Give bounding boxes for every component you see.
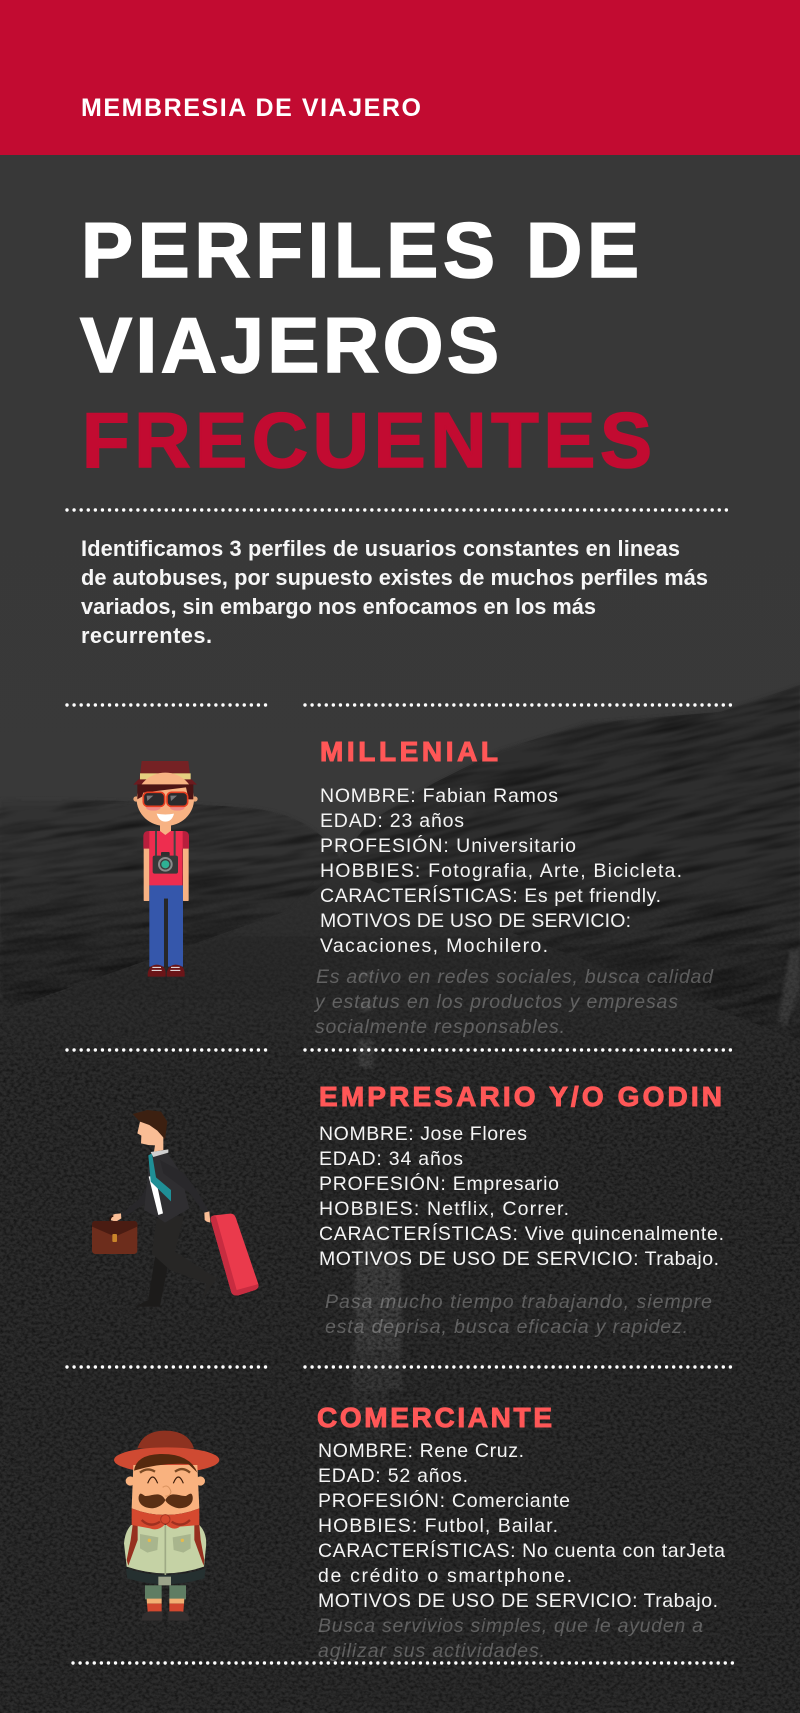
profile details: comerciante	[318, 1440, 725, 1612]
description: comerciante: Busca servivios simples, que le ayuden a	[318, 1615, 703, 1637]
profile details: empresario: PROFESIÓN: Empresario	[319, 1172, 559, 1195]
profile details: millenial: MOTIVOS DE USO DE SERVICIO:	[320, 910, 631, 932]
profile details: comerciante: MOTIVOS DE USO DE SERVICIO: Trabajo.	[318, 1590, 718, 1612]
description: millenial: y estatus en los productos y empresas	[313, 991, 678, 1013]
panel: comerciante	[317, 1402, 725, 1662]
intro paragraph: Identificamos 3 perfiles de usuarios constantes en lineas	[81, 536, 680, 561]
heading: comerciante: COMERCIANTE	[317, 1402, 552, 1433]
icon: businessman with suitcase	[92, 1110, 259, 1307]
panel: millenial	[313, 736, 714, 1038]
description: empresario: esta deprisa, busca eficacia y rapidez.	[325, 1316, 688, 1338]
profile details: comerciante: NOMBRE: Rene Cruz.	[318, 1440, 524, 1462]
description: millenial	[313, 966, 714, 1038]
title: FRECUENTES	[82, 396, 652, 484]
profile details: millenial: EDAD: 23 años	[320, 810, 464, 832]
profile details: millenial: CARACTERÍSTICAS: Es pet friendly.	[320, 884, 661, 907]
profile details: comerciante: PROFESIÓN: Comerciante	[318, 1489, 570, 1512]
title	[80, 206, 652, 484]
description: comerciante: agilizar sus actividades.	[318, 1640, 545, 1662]
intro paragraph	[81, 536, 708, 648]
heading: millenial: MILLENIAL	[320, 736, 498, 767]
title: PERFILES DE	[81, 206, 639, 294]
profile details: millenial: Vacaciones, Mochilero.	[320, 935, 548, 957]
description: millenial: socialmente responsables.	[315, 1016, 565, 1038]
profile details: comerciante: HOBBIES: Futbol, Bailar.	[318, 1515, 558, 1537]
profile details: millenial: HOBBIES: Fotografia, Arte, Bicicleta.	[320, 860, 682, 882]
description: empresario	[325, 1291, 712, 1338]
profile details: empresario: CARACTERÍSTICAS: Vive quincenalmente.	[319, 1222, 724, 1245]
icon: millenial traveler	[133, 761, 198, 977]
profile details: empresario	[319, 1123, 724, 1270]
header band	[0, 0, 800, 155]
intro paragraph: variados, sin embargo nos enfocamos en los más	[81, 594, 596, 619]
description: millenial: Es activo en redes sociales, busca calidad	[316, 966, 714, 988]
profile details: millenial	[320, 785, 682, 957]
profile details: millenial: PROFESIÓN: Universitario	[320, 834, 576, 857]
profile details: comerciante: de crédito o smartphone.	[318, 1565, 572, 1587]
panel: empresario	[319, 1081, 724, 1338]
intro paragraph: recurrentes.	[81, 623, 212, 648]
profile details: empresario: NOMBRE: Jose Flores	[319, 1123, 527, 1145]
profile details: comerciante: CARACTERÍSTICAS: No cuenta con tarJeta	[318, 1539, 725, 1562]
profile details: empresario: EDAD: 34 años	[319, 1148, 463, 1170]
profile details: empresario: HOBBIES: Netflix, Correr.	[319, 1198, 569, 1220]
heading: empresario: EMPRESARIO Y/O GODIN	[319, 1081, 722, 1112]
icon: merchant with moustache	[114, 1431, 219, 1621]
title: VIAJEROS	[80, 301, 499, 389]
header label: MEMBRESIA DE VIAJERO	[81, 94, 421, 122]
profile details: millenial: NOMBRE: Fabian Ramos	[320, 785, 558, 807]
profile details: empresario: MOTIVOS DE USO DE SERVICIO: Trabajo.	[319, 1248, 719, 1270]
intro paragraph: de autobuses, por supuesto existes de muchos perfiles más	[81, 565, 708, 590]
description: empresario: Pasa mucho tiempo trabajando, siempre	[325, 1291, 712, 1313]
description: comerciante	[318, 1615, 703, 1662]
profile details: comerciante: EDAD: 52 años.	[318, 1465, 468, 1487]
